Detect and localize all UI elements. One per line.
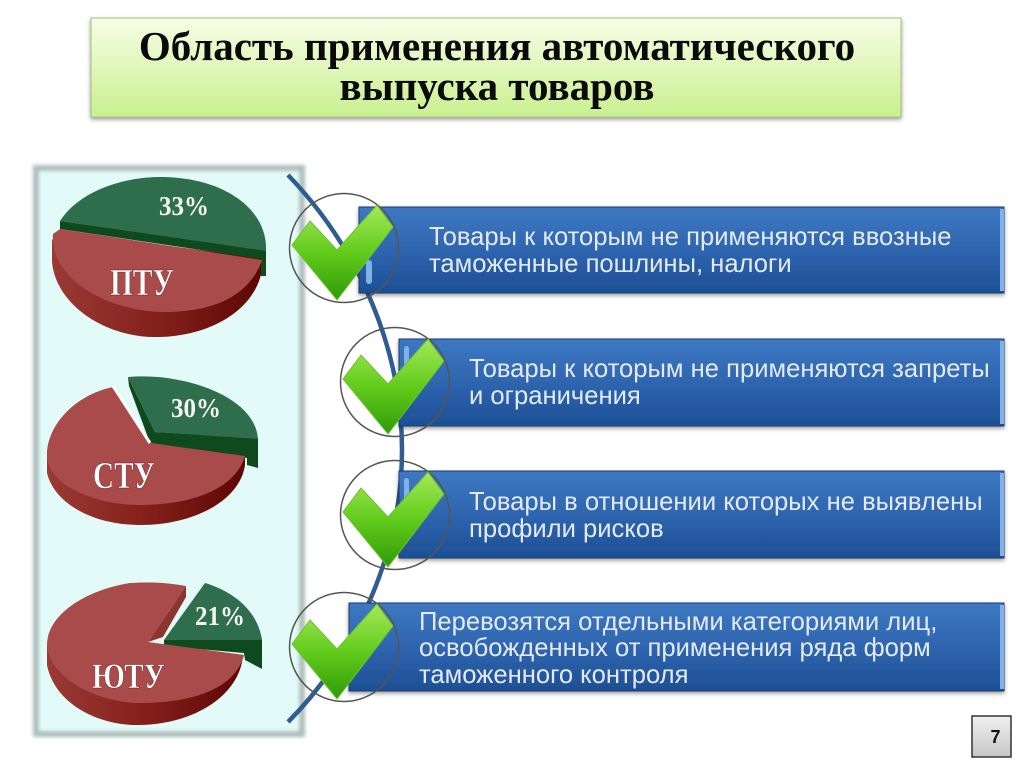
panel: pie charts [36, 168, 302, 734]
title text: Область применения автоматического [139, 23, 855, 69]
pie chart: ПТУ 33% [52, 177, 266, 337]
icon: check 4 [290, 592, 398, 702]
curved connector arc [288, 175, 402, 722]
title banner [91, 18, 901, 117]
bar 3 [399, 471, 1004, 558]
label: ПТУ: ПТУ [110, 262, 174, 304]
pie chart: ЮТУ 21% [47, 582, 262, 725]
label: 30%: 30% [171, 393, 221, 423]
icon: check 2 [340, 328, 450, 436]
icon: check 3 [340, 460, 450, 570]
label: 21%: 21% [195, 601, 245, 631]
bar 2 text: и ограничения [469, 382, 641, 410]
bar 3 text: Товары в отношении которых не выявлены [469, 488, 983, 516]
bar 4 text: таможенного контроля [419, 661, 688, 689]
label: ЮТУ: ЮТУ [92, 656, 165, 696]
bar 3 text: профили рисков [469, 515, 664, 543]
title text: выпуска товаров [339, 63, 655, 109]
label: 33%: 33% [159, 191, 209, 221]
bar 1 [359, 207, 1004, 293]
label: СТУ: СТУ [93, 455, 155, 497]
icon: check 1 [290, 194, 398, 302]
page number [972, 716, 1011, 757]
bar 4 [349, 603, 1004, 691]
bar 2 text: Товары к которым не применяются запреты [469, 355, 990, 383]
bar 4 text: освобожденных от применения ряда форм [419, 634, 931, 662]
bar 1 text: таможенные пошлины, налоги [429, 250, 792, 278]
page number: 7 [990, 727, 1001, 747]
bar 1 text: Товары к которым не применяются ввозные [429, 223, 952, 251]
pie chart: СТУ 30% [47, 376, 258, 525]
bar 4 text: Перевозятся отдельными категориями лиц, [419, 608, 937, 636]
bar 2 [399, 339, 1004, 426]
